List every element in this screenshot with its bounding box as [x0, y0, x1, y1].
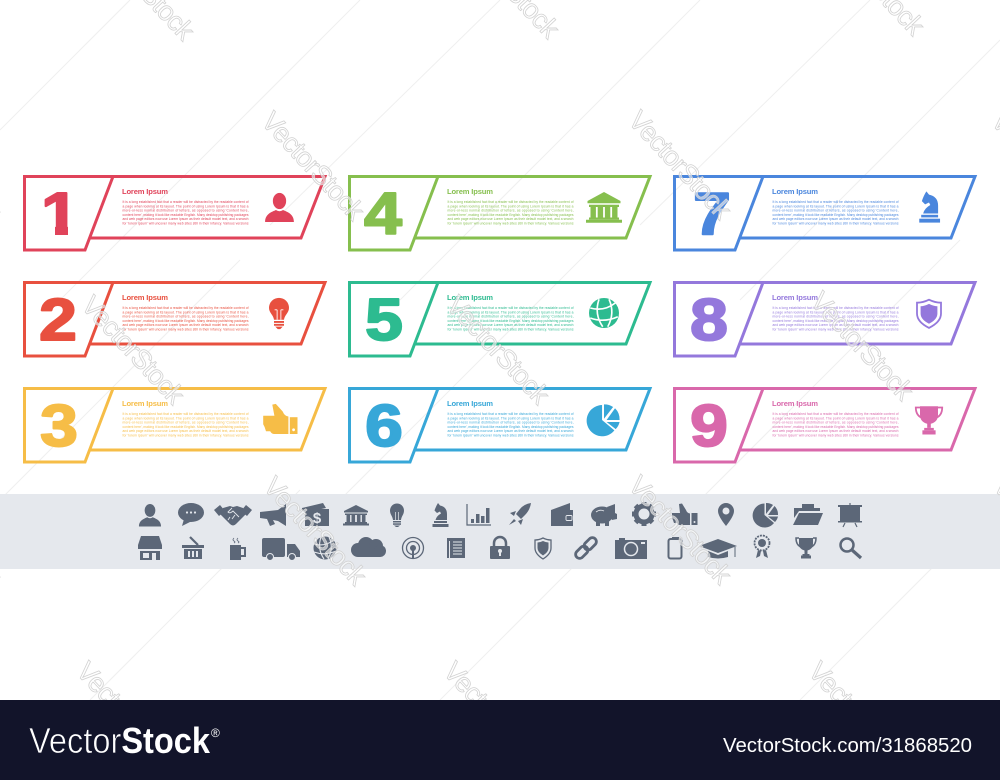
- panel 1: red: a page when looking at its layout. The point of using Lorem Ipsum is that it has a: [122, 204, 249, 208]
- panel 3: yellow: Lorem Ipsum: [122, 399, 168, 408]
- icon: light bulb: [390, 504, 404, 527]
- icon: wallet: [551, 503, 573, 526]
- watermarks: VectorStock: [805, 286, 920, 406]
- icon: document: [447, 538, 465, 558]
- panel 6: sky blue: content here', making it look like readable English. Many desktop publishing packages: [448, 425, 574, 429]
- panel 2: orange red: content here', making it look like readable English. Many desktop publishing packages: [122, 319, 249, 323]
- icon: thumbs up: [672, 504, 698, 525]
- icon: camera: [615, 538, 647, 559]
- watermarks: VectorStock: [803, 656, 918, 776]
- icon: handshake: [214, 505, 252, 526]
- panel 3: yellow: It is a long established fact that a reader will be distracted by the readable content of: [122, 412, 249, 416]
- panel 1: red: for 'lorem ipsum' will uncover many web sites still in their infancy. Various versions: [122, 222, 249, 226]
- icon: gear: [627, 497, 661, 531]
- panel 2: orange red: for 'lorem ipsum' will uncover many web sites still in their infancy. Various versions: [122, 328, 249, 332]
- panel 2: orange red: It is a long established fact that a reader will be distracted by the readable content of: [122, 306, 249, 310]
- panel 4: green: more-or-less normal distribution of letters, as opposed to using 'Content here,: [448, 209, 574, 213]
- panel 4: green: [350, 176, 650, 250]
- panel 1: red: Lorem Ipsum: [122, 187, 168, 196]
- icon: megaphone: [260, 504, 286, 526]
- panel 9: pink: more-or-less normal distribution of letters, as opposed to using 'Content here,: [772, 421, 899, 425]
- icon: bank: [343, 505, 369, 526]
- panel 8: purple: content here', making it look like readable English. Many desktop publishing packages: [772, 319, 899, 323]
- panel 5: teal: more-or-less normal distribution of letters, as opposed to using 'Content here,: [448, 315, 574, 319]
- registered mark: ®: [211, 726, 220, 740]
- panel 4: green: for 'lorem ipsum' will uncover many web sites still in their infancy. Various versions: [448, 222, 574, 226]
- icon row 1: [139, 497, 862, 531]
- panel 8: purple: [674, 282, 975, 356]
- watermarks: VectorStock: [438, 656, 553, 776]
- icon band: [0, 494, 1000, 569]
- panel 1: red: 1: [41, 181, 79, 247]
- panel 7: blue: a page when looking at its layout. The point of using Lorem Ipsum is that it has a: [772, 204, 899, 208]
- icon: award ribbon: [754, 536, 770, 558]
- icon: money: [302, 503, 329, 527]
- panel 3: yellow: 3: [40, 393, 78, 459]
- panel 7: blue: [674, 176, 975, 250]
- panel 8: purple: for 'lorem ipsum' will uncover many web sites still in their infancy. Various versions: [772, 328, 899, 332]
- panel 1: red: It is a long established fact that a reader will be distracted by the readable content of: [122, 200, 249, 204]
- panel 2: orange red: and web page editors now use Lorem Ipsum as their default model text, and a search: [122, 323, 249, 327]
- panel 9: pink: for 'lorem ipsum' will uncover many web sites still in their infancy. Various versions: [772, 434, 899, 438]
- icon: folder: [793, 504, 823, 525]
- panel 7: blue: and web page editors now use Lorem Ipsum as their default model text, and a search: [772, 217, 899, 221]
- icon: trophy: [796, 538, 816, 558]
- icon: shield: [535, 538, 551, 559]
- panel 9: pink: content here', making it look like readable English. Many desktop publishing packages: [772, 425, 899, 429]
- icon: graduation cap: [699, 539, 737, 558]
- panel 4: green: content here', making it look like readable English. Many desktop publishing packages: [448, 213, 574, 217]
- panel 7: blue: Lorem Ipsum: [772, 187, 818, 196]
- panel 4: green: 4: [364, 181, 403, 247]
- panel 9: pink: Lorem Ipsum: [772, 399, 818, 408]
- panel 5: teal: a page when looking at its layout. The point of using Lorem Ipsum is that it has a: [448, 310, 574, 314]
- icon: truck: [262, 538, 300, 560]
- icon row 2: [138, 536, 861, 560]
- panel 2: orange red: 2: [39, 287, 77, 353]
- footer bar: [0, 700, 1000, 780]
- panel 5: teal: [350, 282, 650, 356]
- icon: magnifier: [840, 538, 861, 558]
- icon: money: $: [313, 510, 322, 527]
- panel 6: sky blue: [350, 388, 650, 462]
- watermarks: VectorStock: [256, 106, 371, 226]
- panel 6: sky blue: and web page editors now use Lorem Ipsum as their default model text, and a search: [448, 429, 574, 433]
- panel 7: blue: 7: [693, 181, 731, 247]
- icon: globe: [314, 536, 336, 560]
- panel 5: teal: content here', making it look like readable English. Many desktop publishing packages: [448, 319, 574, 323]
- icon: rocket: [509, 503, 531, 525]
- icon: chain link: [574, 536, 598, 560]
- icon: presentation board: [838, 503, 862, 527]
- icon: padlock: [490, 537, 510, 559]
- icon: shop: [138, 536, 162, 560]
- icon: person: [139, 504, 161, 526]
- panel 9: pink: It is a long established fact that a reader will be distracted by the readable content of: [772, 412, 899, 416]
- panel 5: teal: Lorem Ipsum: [447, 293, 493, 302]
- panel 9: pink: and web page editors now use Lorem Ipsum as their default model text, and a search: [772, 429, 899, 433]
- panel 6: sky blue: 6: [365, 393, 403, 459]
- icon: cloud: [351, 537, 386, 557]
- panel 3: yellow: [24, 388, 325, 462]
- panel 8: purple: a page when looking at its layout. The point of using Lorem Ipsum is that it has a: [772, 310, 899, 314]
- watermarks: VectorStock: [258, 471, 373, 591]
- panel 3: yellow: and web page editors now use Lorem Ipsum as their default model text, and a search: [122, 429, 249, 433]
- panel 2: orange red: Lorem Ipsum: [122, 293, 168, 302]
- icon: tablet clipboard: [668, 537, 682, 558]
- panel 4: green: and web page editors now use Lorem Ipsum as their default model text, and a search: [448, 217, 574, 221]
- footer url: VectorStock.com/31868520: [723, 735, 972, 757]
- panel 7: blue: more-or-less normal distribution of letters, as opposed to using 'Content here,: [772, 209, 899, 213]
- icon: bar chart: [467, 504, 491, 525]
- panel 8: purple: It is a long established fact that a reader will be distracted by the readable content of: [772, 306, 899, 310]
- panel 1: red: more-or-less normal distribution of letters, as opposed to using 'Content here,: [122, 209, 249, 213]
- panel 2: orange red: a page when looking at its layout. The point of using Lorem Ipsum is that it has a: [122, 310, 249, 314]
- watermarks: VectorStock: [76, 290, 191, 410]
- panel 2: orange red: [24, 282, 325, 356]
- panel 6: sky blue: more-or-less normal distribution of letters, as opposed to using 'Content here,: [448, 421, 574, 425]
- panel 4: green: a page when looking at its layout. The point of using Lorem Ipsum is that it has a: [448, 204, 574, 208]
- icon: chess knight: [432, 503, 448, 527]
- panel 5: teal: for 'lorem ipsum' will uncover many web sites still in their infancy. Various versions: [448, 328, 574, 332]
- watermarks: VectorStock: [71, 656, 186, 776]
- panel 3: yellow: a page when looking at its layout. The point of using Lorem Ipsum is that it has a: [122, 416, 249, 420]
- watermarks: VectorStock: [623, 105, 738, 225]
- panel 1: red: [24, 176, 325, 250]
- panel 9: pink: 9: [690, 393, 728, 459]
- panel 6: sky blue: It is a long established fact that a reader will be distracted by the readable content of: [448, 412, 574, 416]
- panel 3: yellow: for 'lorem ipsum' will uncover many web sites still in their infancy. Various versions: [122, 434, 249, 438]
- panel 6: sky blue: Lorem Ipsum: [447, 399, 493, 408]
- icon: basket: [182, 537, 204, 559]
- watermarks: VectorStock: [623, 470, 738, 590]
- panel 4: green: Lorem Ipsum: [447, 187, 493, 196]
- footer logo: VectorStock: [29, 720, 211, 761]
- panel 1: red: and web page editors now use Lorem Ipsum as their default model text, and a search: [122, 217, 249, 221]
- panel 7: blue: It is a long established fact that a reader will be distracted by the readable content of: [772, 200, 899, 204]
- icon: piggy bank: [591, 504, 617, 526]
- panel 7: blue: for 'lorem ipsum' will uncover many web sites still in their infancy. Various versions: [772, 222, 899, 226]
- icon: coffee mug: [230, 538, 245, 560]
- panel 2: orange red: more-or-less normal distribution of letters, as opposed to using 'Content here,: [122, 315, 249, 319]
- icon: broadcast: [402, 538, 424, 559]
- panel 6: sky blue: a page when looking at its layout. The point of using Lorem Ipsum is that it has a: [448, 416, 574, 420]
- panel 1: red: content here', making it look like readable English. Many desktop publishing packages: [122, 213, 249, 217]
- panel 4: green: It is a long established fact that a reader will be distracted by the readable content of: [448, 200, 574, 204]
- panel 8: purple: more-or-less normal distribution of letters, as opposed to using 'Content here,: [772, 315, 899, 319]
- icon: speech bubble: [178, 503, 204, 526]
- panel 8: purple: 8: [690, 287, 728, 353]
- panel 3: yellow: content here', making it look like readable English. Many desktop publishing packages: [122, 425, 249, 429]
- panel 9: pink: a page when looking at its layout. The point of using Lorem Ipsum is that it has a: [772, 416, 899, 420]
- panel 9: pink: [674, 388, 975, 462]
- panel 5: teal: and web page editors now use Lorem Ipsum as their default model text, and a search: [448, 323, 574, 327]
- panel 5: teal: 5: [365, 287, 403, 353]
- panel 3: yellow: more-or-less normal distribution of letters, as opposed to using 'Content here,: [122, 421, 249, 425]
- panel 7: blue: content here', making it look like readable English. Many desktop publishing packages: [772, 213, 899, 217]
- icon: pie chart: [753, 503, 778, 527]
- panel 8: purple: Lorem Ipsum: [772, 293, 818, 302]
- panel 5: teal: It is a long established fact that a reader will be distracted by the readable content of: [448, 306, 574, 310]
- icon: location pin: [718, 503, 734, 526]
- panel 6: sky blue: for 'lorem ipsum' will uncover many web sites still in their infancy. Various versions: [448, 434, 574, 438]
- panel 8: purple: and web page editors now use Lorem Ipsum as their default model text, and a search: [772, 323, 899, 327]
- watermarks: VectorStock: [441, 290, 556, 410]
